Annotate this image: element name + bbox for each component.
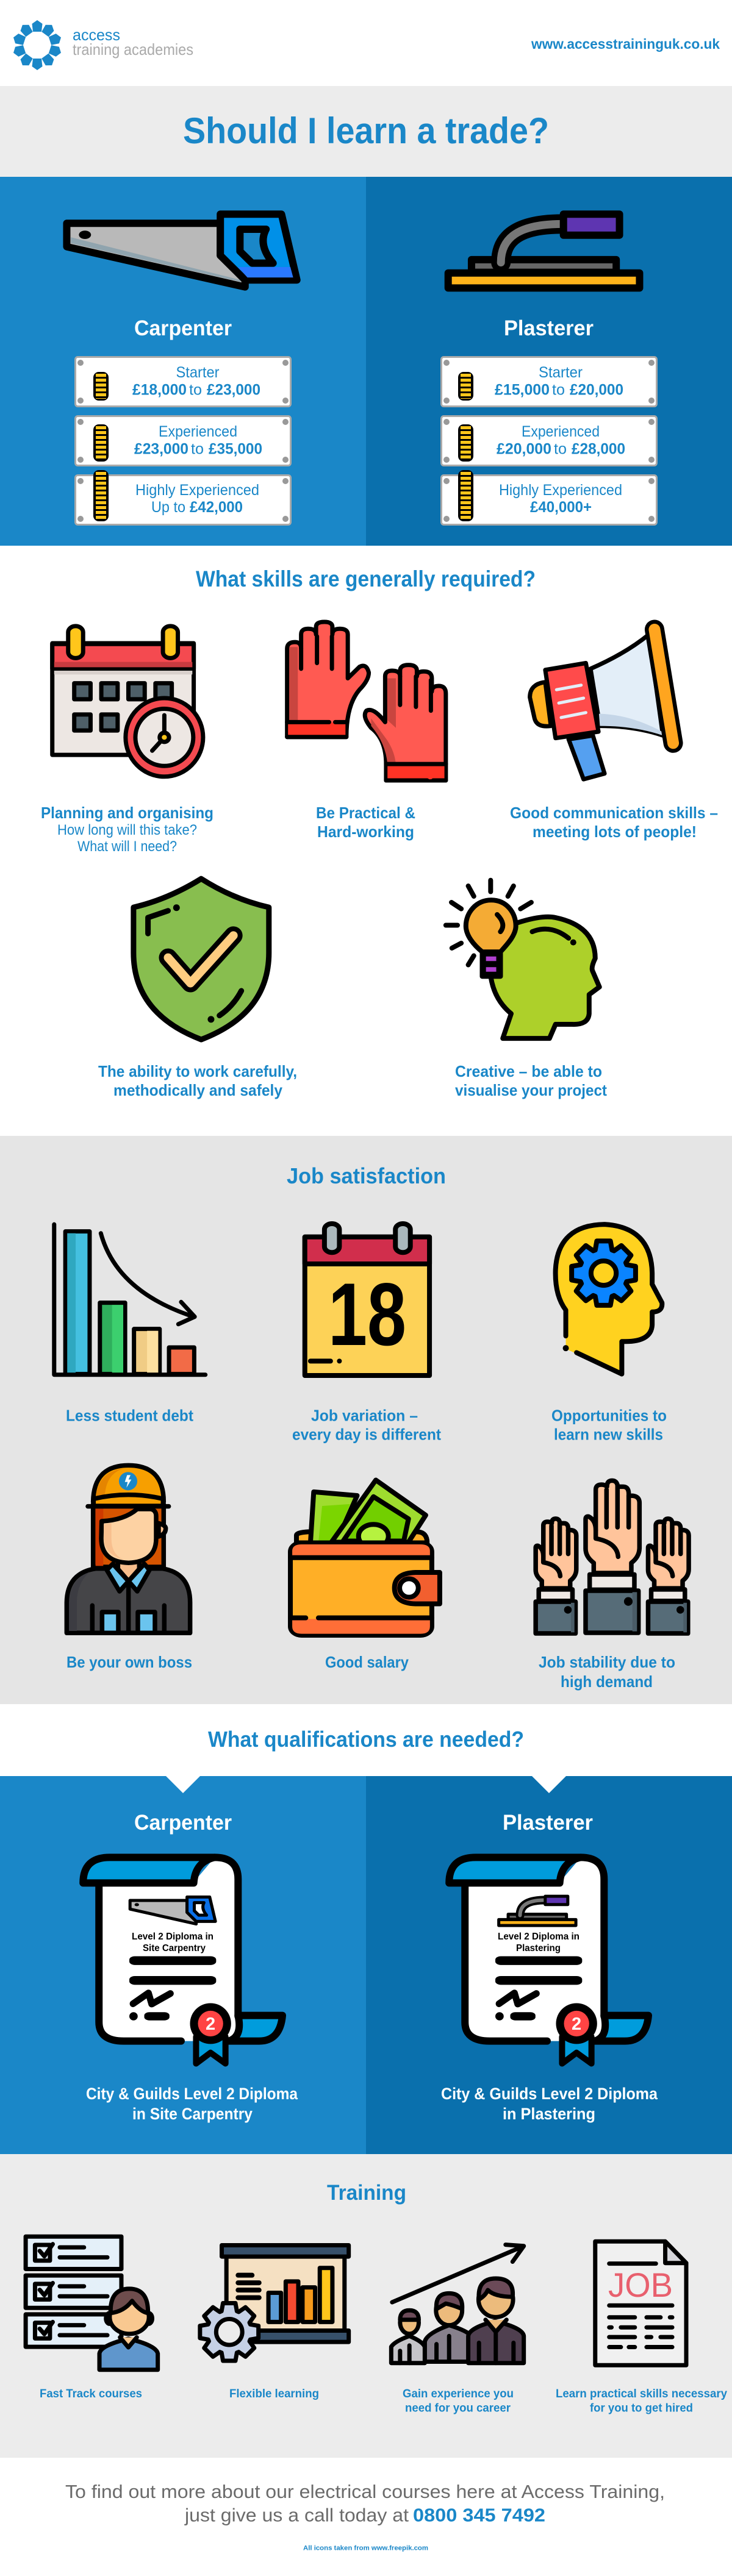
text: communication: Good communication skills – [510, 804, 718, 822]
icon credit: All icons taken from www.freepik.com [303, 2545, 428, 2552]
card: starter: Starter [539, 364, 583, 381]
text: job stability: Job stability due to [539, 1653, 675, 1671]
text: experience: Gain experience you [403, 2388, 514, 2400]
text: communication [510, 804, 718, 841]
text: carpentry diploma: in Site Carpentry [132, 2105, 253, 2123]
panel: carpenter salaries [0, 177, 366, 546]
card: experienced: £35,000 [209, 440, 262, 457]
icon: wallet with money [290, 1480, 440, 1635]
hand: centre [586, 1480, 639, 1633]
card: highly experienced: £42,000 [190, 499, 243, 516]
icon: raised hands [536, 1480, 689, 1633]
card: highly experienced [76, 470, 290, 524]
logo wordmark [73, 26, 193, 59]
icon: plastering diploma: 2 [572, 2014, 581, 2034]
icon: worker in hard hat [66, 1465, 190, 1633]
panel: plasterer qualification [366, 1776, 732, 2154]
card: experienced: £20,000 [497, 440, 551, 457]
card: experienced [442, 416, 656, 466]
text: practical [316, 804, 415, 841]
logo wordmark: training academies [73, 40, 193, 59]
footer call to action: just give us a call today at [184, 2505, 409, 2525]
card: highly experienced [442, 470, 656, 524]
text: new skills: learn new skills [554, 1425, 663, 1444]
icon: checklist and person [26, 2236, 158, 2370]
card: starter [76, 357, 290, 406]
icon: plastering diploma: Plastering [516, 1943, 561, 1953]
footer call to action: 0800 345 7492 [413, 2505, 545, 2525]
text: job variation: Job variation – [311, 1406, 418, 1424]
icon: growing team with arrow [391, 2245, 524, 2363]
card: experienced: to [554, 440, 567, 457]
text: job variation: every day is different [292, 1425, 441, 1444]
text: carpentry diploma [86, 2085, 298, 2123]
card: highly experienced: Highly Experienced [135, 482, 259, 499]
text: new skills [551, 1406, 667, 1444]
text: plastering diploma: in Plastering [503, 2105, 595, 2123]
text: experience: need for you career [405, 2402, 511, 2414]
title band [0, 86, 732, 177]
icon: calendar and clock [52, 626, 203, 777]
icon: job document [595, 2241, 686, 2365]
card: starter: £23,000 [207, 382, 260, 399]
card: experienced: £28,000 [572, 440, 625, 457]
card: starter: £15,000 [495, 382, 550, 399]
heading: qualifications: What qualifications are needed? [208, 1727, 524, 1752]
text: careful: The ability to work carefully, [98, 1062, 297, 1080]
icon: logo ring [12, 20, 63, 70]
card: experienced: to [191, 440, 204, 457]
icon: calendar showing 18 [305, 1224, 429, 1375]
card: highly experienced: £40,000+ [530, 499, 592, 516]
icon: presentation board and gear [200, 2245, 349, 2361]
card: starter: £20,000 [570, 382, 623, 399]
icon: site carpentry diploma: 2 [206, 2014, 215, 2034]
text: planning: Planning and organising [41, 804, 214, 822]
pointer [166, 1776, 200, 1793]
text: creative: Creative – be able to [455, 1062, 602, 1080]
card: starter: £18,000 [132, 382, 187, 399]
card: experienced [76, 416, 290, 466]
hand: right [648, 1519, 689, 1633]
header [0, 0, 732, 86]
panel: job satisfaction [0, 1136, 732, 1704]
icon: plastering diploma [449, 1857, 648, 2063]
text: practical: Be Practical & [316, 804, 415, 822]
heading: skills: What skills are generally required? [196, 566, 536, 591]
text: flexible learning: Flexible learning [229, 2388, 319, 2400]
footer call to action: To find out more about our electrical courses here at Access Training, [65, 2481, 665, 2502]
hand: left [536, 1519, 576, 1633]
text: student debt: Less student debt [66, 1406, 193, 1424]
text: careful: methodically and safely [113, 1081, 283, 1099]
text: practical: Hard-working [317, 822, 414, 841]
panel: skills [0, 546, 732, 1136]
icon: shield with tick [134, 879, 269, 1040]
text: plastering diploma: City & Guilds Level 2 Diploma [441, 2085, 658, 2103]
text: creative: visualise your project [455, 1081, 607, 1099]
icon: site carpentry diploma: Site Carpentry [143, 1943, 206, 1953]
card: starter [442, 357, 656, 406]
card: starter: Starter [176, 364, 220, 381]
text: planning [41, 804, 214, 855]
text: job stability: high demand [561, 1672, 653, 1691]
text: salary: Good salary [325, 1653, 409, 1671]
text: job variation [292, 1406, 441, 1444]
text: experience [403, 2388, 514, 2414]
card: experienced: Experienced [159, 423, 237, 440]
text: planning: What will I need? [77, 838, 177, 855]
text: job stability [539, 1653, 675, 1691]
card: starter: to [189, 382, 202, 399]
text: carpentry diploma: City & Guilds Level 2 Diploma [86, 2085, 298, 2103]
title: Should I learn a trade? [183, 110, 549, 151]
text: own boss: Be your own boss [66, 1653, 192, 1671]
icon: head with gear [556, 1224, 662, 1374]
website url: www.accesstraininguk.co.uk [531, 36, 720, 52]
icon: plastering trowel [448, 214, 639, 288]
heading: carpenter: Carpenter [134, 1811, 232, 1835]
text: fast track: Fast Track courses [40, 2388, 142, 2400]
card: highly experienced: Highly Experienced [499, 482, 622, 499]
text: planning: How long will this take? [57, 822, 197, 838]
text: practical skills: for you to get hired [590, 2402, 693, 2414]
card: experienced: Experienced [522, 423, 600, 440]
icon: work gloves [287, 622, 446, 780]
icon: megaphone [530, 629, 673, 779]
panel: plasterer salaries [366, 177, 732, 546]
heading: carpenter: Carpenter [134, 316, 232, 340]
text: creative [455, 1062, 607, 1099]
icon: saw [66, 214, 297, 287]
panel: carpenter qualification [0, 1776, 366, 2154]
heading: plasterer: Plasterer [504, 316, 594, 340]
logo wordmark: access [73, 26, 120, 44]
text: plastering diploma [441, 2085, 658, 2123]
icon: job document: JOB [608, 2266, 673, 2304]
card: starter: to [552, 382, 565, 399]
text: practical skills: Learn practical skills necessary [556, 2388, 727, 2400]
panel: training [0, 2154, 732, 2458]
icon: calendar showing 18: 18 [328, 1265, 406, 1364]
heading: plasterer: Plasterer [503, 1811, 593, 1835]
icon: plastering diploma: Level 2 Diploma in [498, 1932, 580, 1942]
footer call to action [65, 2481, 665, 2525]
card: experienced: £23,000 [134, 440, 188, 457]
card: highly experienced: Up to [151, 499, 185, 516]
icon: head with light bulb [446, 880, 600, 1038]
pointer [532, 1776, 566, 1793]
icon: site carpentry diploma [83, 1857, 282, 2063]
heading: job satisfaction: Job satisfaction [287, 1163, 446, 1188]
icon: falling bar chart [54, 1224, 206, 1375]
text: communication: meeting lots of people! [533, 822, 697, 841]
icon: site carpentry diploma: Level 2 Diploma in [132, 1932, 214, 1942]
heading: training: Training [327, 2181, 406, 2205]
text: practical skills [556, 2388, 727, 2414]
text: careful [98, 1062, 297, 1099]
text: new skills: Opportunities to [551, 1406, 667, 1424]
